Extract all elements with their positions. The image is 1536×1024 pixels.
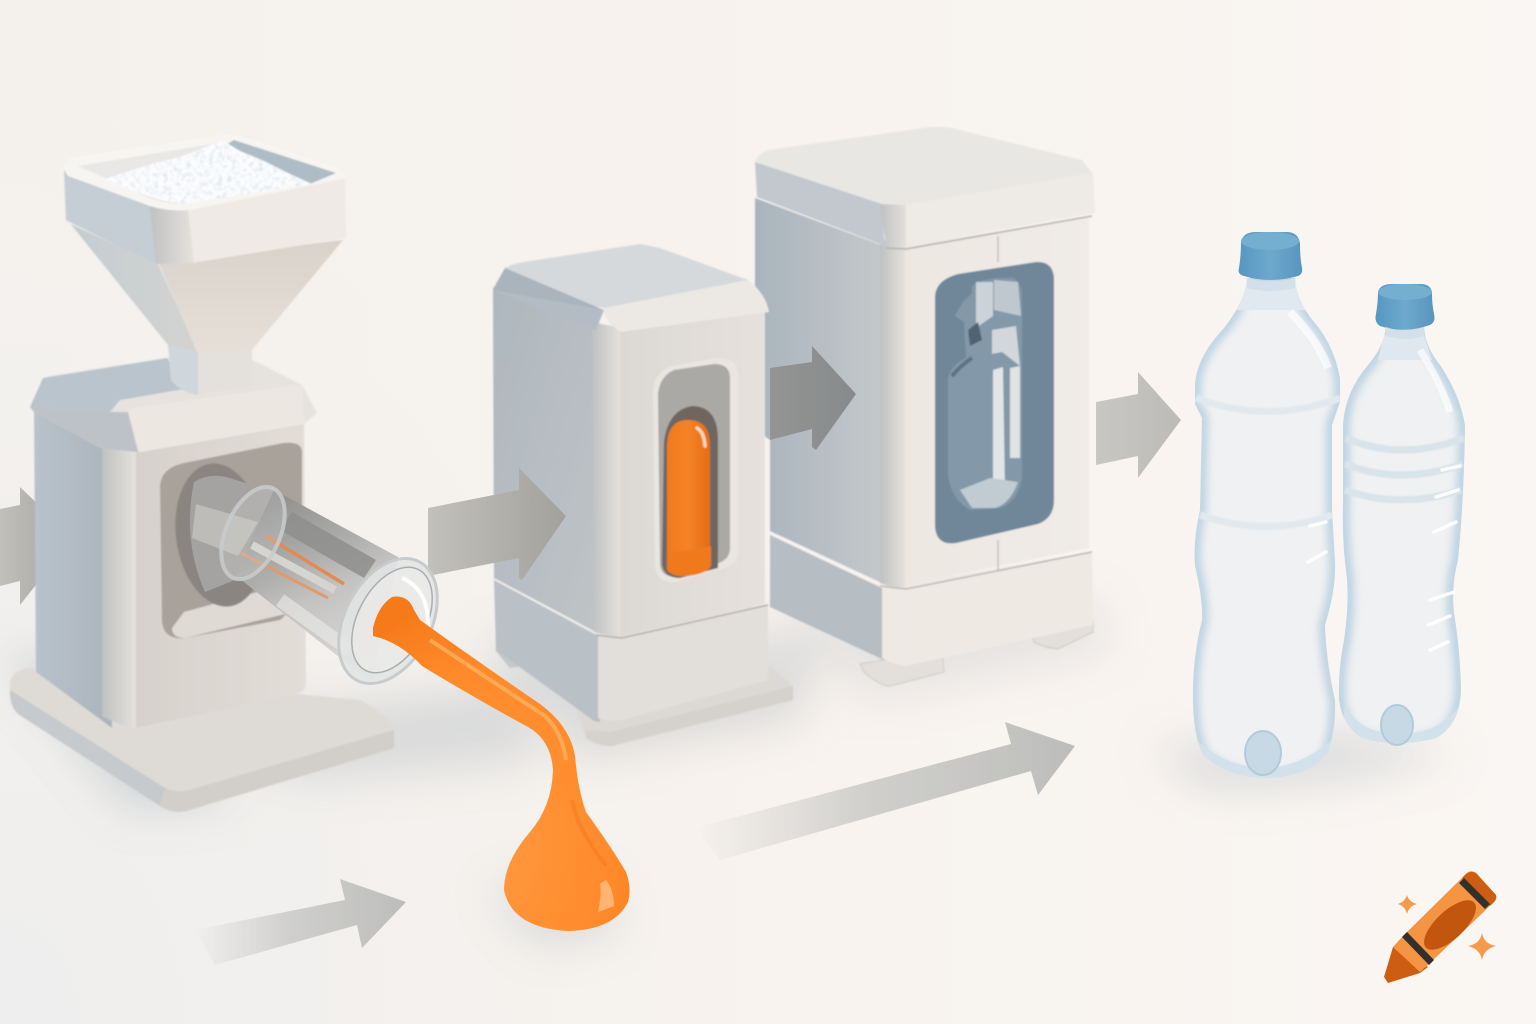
small bottle body bbox=[1338, 326, 1465, 743]
floor shadows bbox=[0, 600, 1460, 945]
small bottle base knob bbox=[1381, 705, 1413, 745]
arrow: machine 3 to bottles bbox=[1096, 372, 1181, 478]
small bottle bbox=[1338, 284, 1465, 746]
large bottle neck bbox=[1247, 278, 1295, 291]
bottle mould cavity bbox=[948, 278, 1022, 510]
machine 2 corner bbox=[592, 322, 622, 636]
preform bbox=[667, 420, 711, 576]
large bottle cap bbox=[1239, 232, 1302, 280]
machine 1 cap bbox=[30, 358, 317, 452]
machine 2: preform mould bbox=[493, 244, 793, 746]
arrow: machine 1 to machine 2 bbox=[428, 468, 566, 580]
hopper rim bbox=[63, 135, 346, 210]
machine 3 upper front bbox=[905, 216, 1089, 585]
machine 3 lower front bbox=[882, 552, 1093, 666]
glass collar bbox=[208, 477, 298, 589]
machine 3 window bbox=[935, 262, 1054, 543]
barrel end ring bbox=[319, 542, 457, 700]
hopper bbox=[63, 135, 346, 395]
machine 3 lid front bbox=[906, 173, 1095, 246]
machine 3 lid top bbox=[755, 127, 1093, 207]
preform niche bbox=[662, 406, 718, 578]
crayon tip bbox=[1384, 947, 1428, 983]
pellets bbox=[103, 140, 312, 203]
large bottle base knob bbox=[1245, 731, 1281, 775]
machine 1 body front bbox=[136, 418, 306, 728]
sparkle bbox=[1468, 933, 1496, 960]
machine 2 upper front bbox=[620, 308, 765, 636]
hopper inner wall bbox=[78, 142, 334, 204]
large bottle bbox=[1185, 232, 1345, 785]
small bottle cap bbox=[1376, 284, 1434, 330]
extruder window recess bbox=[160, 443, 302, 638]
machine 2 base plinth bbox=[578, 667, 793, 746]
hopper inner back wall bbox=[224, 140, 336, 184]
arrow: machine 2 to machine 3 bbox=[770, 346, 856, 450]
machine 3 corner bbox=[880, 240, 906, 587]
small bottle neck bbox=[1386, 327, 1424, 339]
logo: crayon bbox=[1384, 871, 1496, 983]
hopper neck bbox=[168, 345, 252, 395]
hopper funnel right bbox=[158, 240, 343, 354]
machine 2 lower front bbox=[598, 604, 768, 721]
sparkle bbox=[1398, 895, 1417, 914]
crayon body bbox=[1393, 871, 1496, 972]
machine 2 top bbox=[493, 244, 769, 332]
machine 2 upper left bbox=[493, 290, 596, 632]
hopper funnel left bbox=[65, 217, 198, 352]
machine 1: extruder bbox=[10, 358, 394, 812]
machine 1 base bbox=[10, 668, 394, 812]
molten plastic stream and drop bbox=[373, 597, 630, 931]
machine 2 small foot bbox=[495, 642, 530, 668]
large bottle body bbox=[1192, 278, 1340, 778]
machine 1 rounded corner bbox=[102, 440, 137, 728]
barrel socket bbox=[166, 458, 274, 612]
arrow: floor short bbox=[195, 879, 406, 965]
machine 3 feet bbox=[860, 650, 944, 686]
machine 3 lid corner bbox=[880, 204, 908, 246]
machine 2 window bbox=[653, 358, 738, 582]
machine 1 body left side bbox=[34, 408, 112, 728]
glass tube body bbox=[235, 490, 398, 683]
arrow: input to extruder bbox=[0, 487, 73, 605]
machine 3 lower left bbox=[770, 535, 884, 660]
hopper upper band bbox=[64, 170, 346, 263]
machine 3 lid left bbox=[755, 162, 888, 247]
machine 3 upper left bbox=[755, 198, 884, 584]
machine 3: blow mould bbox=[755, 127, 1095, 686]
stream and drop shape bbox=[373, 597, 630, 931]
metal inner shaft bbox=[190, 476, 280, 592]
arrow: floor long bbox=[695, 722, 1075, 860]
extruder barrel bbox=[190, 476, 457, 700]
machine 2 lower left bbox=[494, 580, 600, 722]
